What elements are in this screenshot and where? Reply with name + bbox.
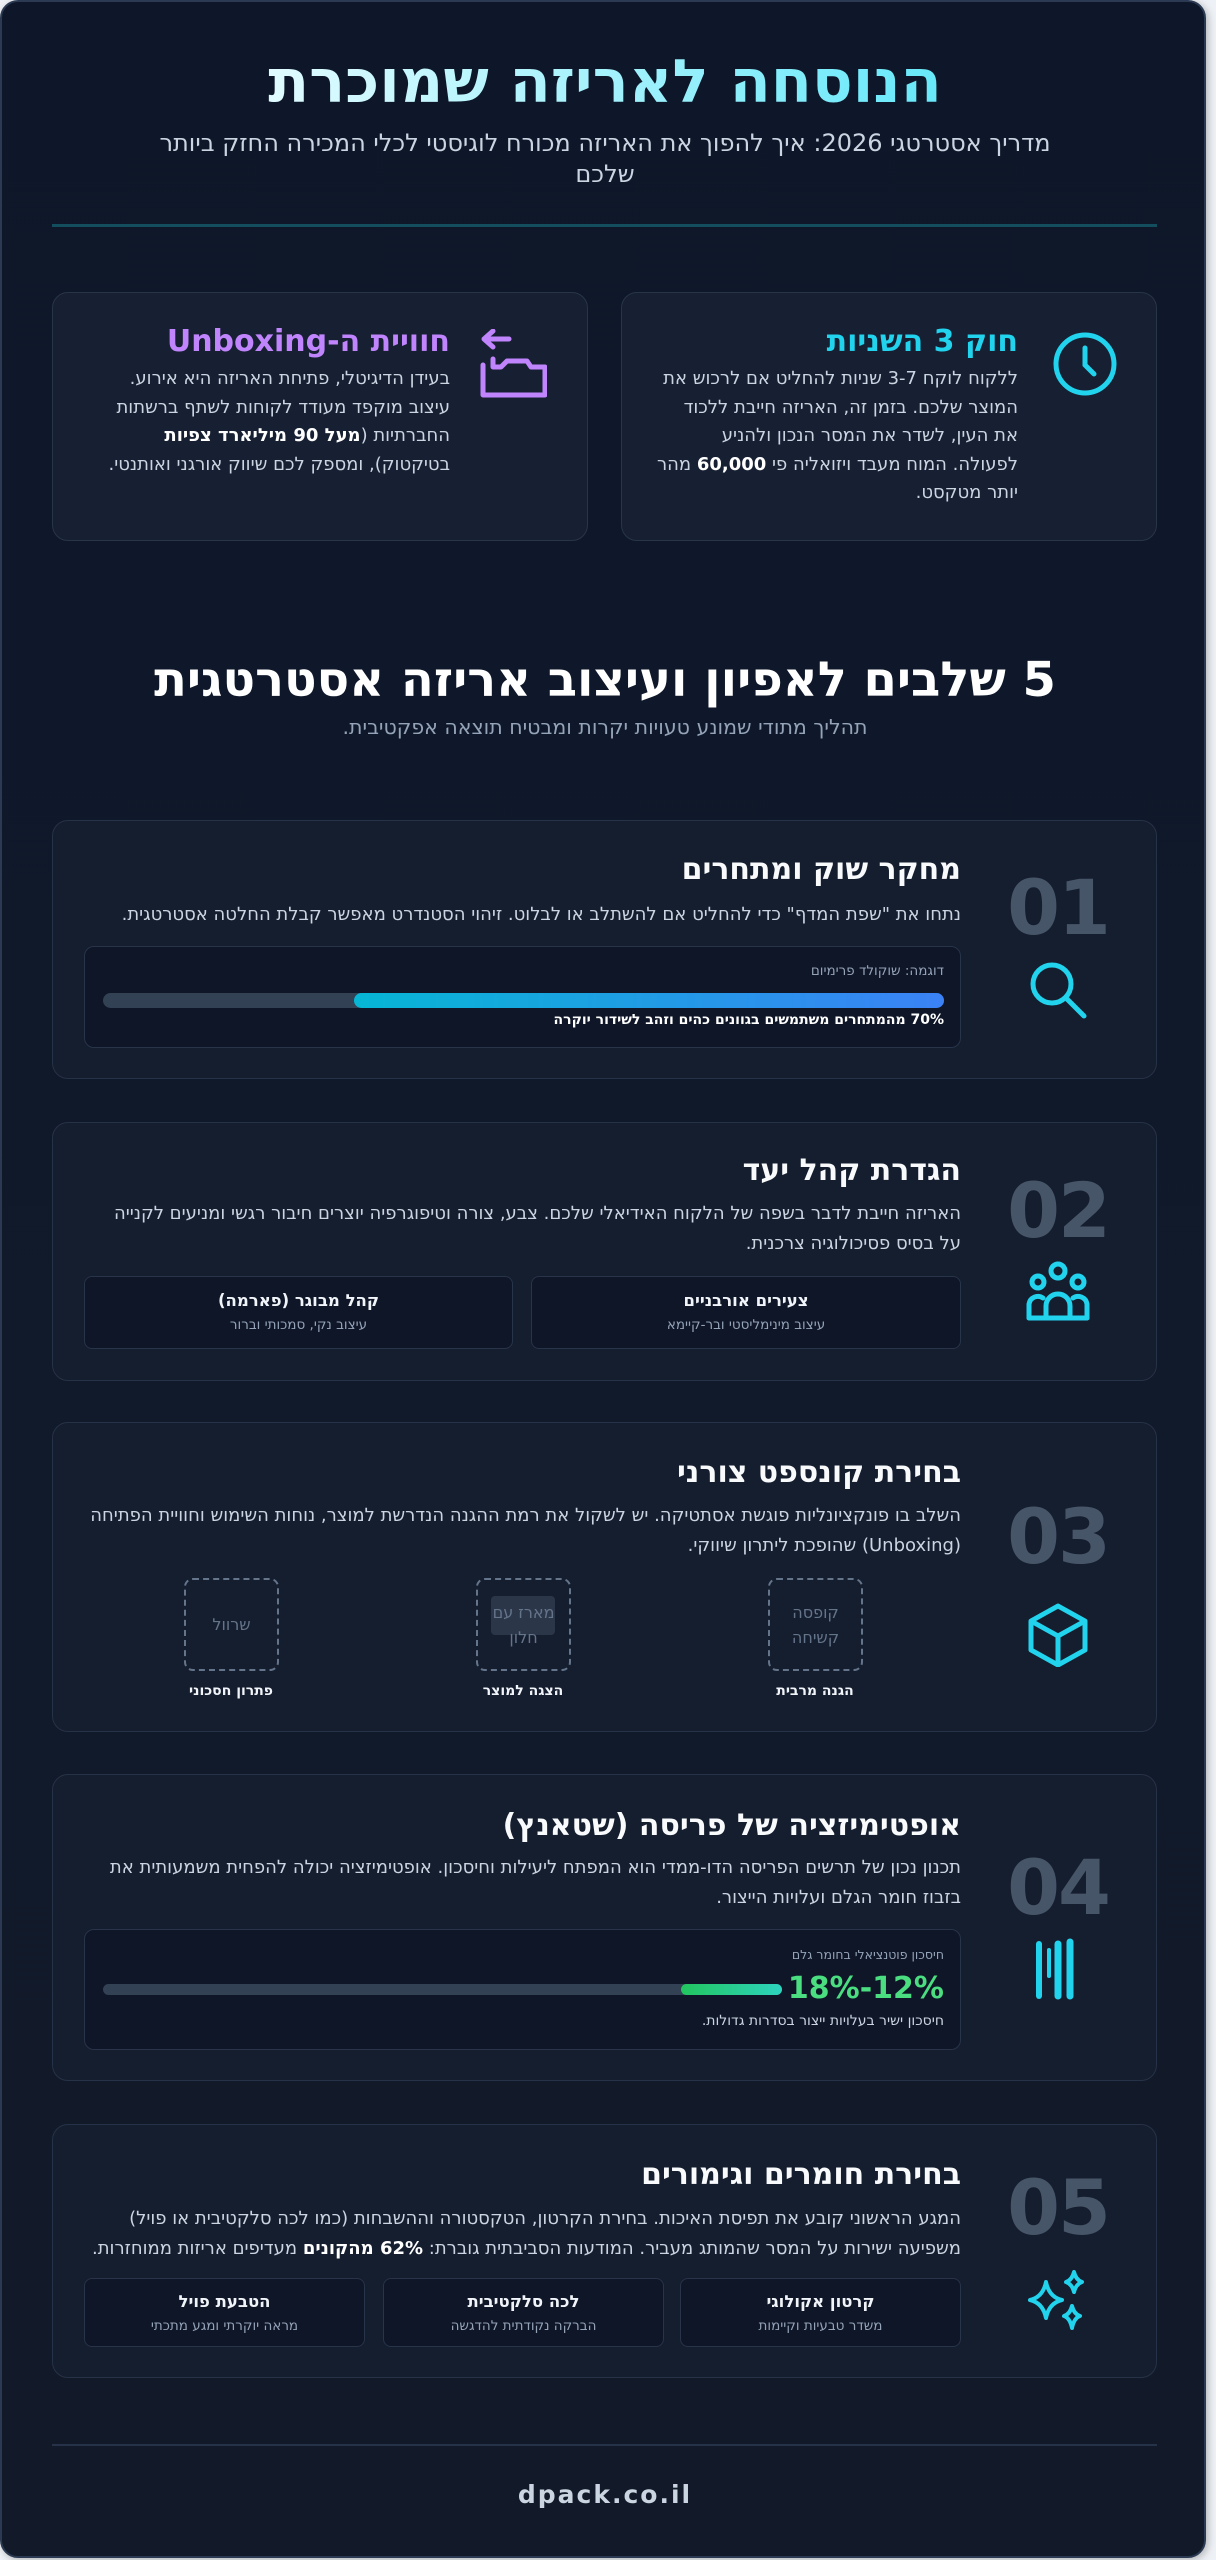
panel: step 03 [52,1422,1157,1732]
box: spot UV: לכה סלקטיבית [467,2292,580,2311]
box: foil [84,2278,365,2347]
option: rigid box: הגנה מרבית [776,1683,854,1699]
icon: people [1026,1262,1090,1320]
step text 02: על בסיס פסיכולוגיה צרכנית. [746,1232,961,1254]
option: sleeve: שרוול [212,1615,251,1634]
box: eco cardboard [680,2278,961,2347]
bar chart: material savings: 18%-12% [788,1971,944,2006]
text: unboxing: בעידן הדיגיטלי, פתיחת האריזה היא אירוע. [130,368,450,389]
step text 02: האריזה חייבת לדבר בשפה של הלקוח האידיאלי שלכם. צבע, צורה וטיפוגרפיה יוצרים חיבור רגשי ומניעים לקנייה [114,1203,961,1224]
bar chart: material savings: חיסכון פוטנציאלי בחומר גלם [792,1947,944,1962]
heading: 3 second rule: חוק 3 השניות [827,324,1018,359]
bar chart: material savings: חיסכון ישיר בעלויות ייצור בסדרות גדולות. [702,2013,944,2029]
panel: unboxing [52,292,588,541]
text: 3 second rule: את העין, לשדר את המסר הנכון ולהניע [722,425,1018,446]
step text 05: משפיעה ישירות על המסר שהמותג מעביר. המודעות הסביבתית גוברת: 62% מהקונים מעדיפים אריזות ממוחזרות. [92,2238,961,2258]
text: unboxing: עיצוב מוקפד מעודד לקוחות לשתף ברשתות [116,396,450,418]
section subtitle: תהליך מתודי שמונע טעויות יקרות ומבטיח תוצאה אפקטיבית. [342,715,867,739]
panel: step 04 [52,1774,1157,2081]
bar chart: competitors: דוגמה: שוקולד פרימיום [811,963,944,979]
box: urban youth [531,1276,961,1349]
icon: search [1030,962,1086,1018]
text: 3 second rule: ללקוח לוקח 3-7 שניות להחליט אם לרכוש את [663,368,1018,389]
number 02: 02 [1007,1166,1109,1255]
option: window box [476,1578,571,1699]
footer: website: dpack.co.il [518,2480,692,2509]
text: 3 second rule: המוצר שלכם. בזמן זה, האריזה חייבת ללכוד [684,396,1018,418]
title: הנוסחה לאריזה שמוכרת [268,47,942,117]
text: 3 second rule: לפעולה. המוח מעבד ויזואליה פי 60,000 מהר [657,454,1018,474]
option: rigid box [768,1578,863,1699]
step text 03 [90,1505,961,1556]
heading: unboxing: חוויית ה-Unboxing [167,324,450,359]
box: mature audience: קהל מבוגר (פארמה) [218,1291,379,1310]
text: unboxing [108,368,450,474]
number 04: 04 [1007,1843,1109,1932]
option: rigid box: קשיחה [792,1628,839,1646]
step title 02: הגדרת קהל יעד [743,1153,961,1188]
subtitle: מדריך אסטרטגי 2026: איך להפוך את האריזה מכורח לוגיסטי לכלי המכירה החזק ביותר [159,129,1051,157]
box: foil: מראה יוקרתי ומגע מתכתי [151,2318,298,2334]
panel: 3 second rule [621,292,1157,541]
icon: clock [1054,332,1116,396]
step text 04: תכנון נכון של תרשים הפריסה הדו-ממדי הוא המפתח ליעילות וחיסכון. אופטימיזציה יכולה להפחית משמעותית את [110,1857,961,1878]
step text 02 [114,1203,961,1254]
box: eco cardboard: משדר טבעיות וקיימות [759,2318,882,2334]
step text 01: נתחו את "שפת המדף" כדי להחליט אם להשתלב או לבלוט. זיהוי הסטנדרט מאפשר קבלת החלטה אסטרטגית. [122,904,961,925]
option: rigid box: קופסה [792,1602,839,1622]
step text 05 [92,2208,961,2258]
box: eco cardboard: קרטון אקולוגי [766,2292,875,2311]
panel: step 05 [52,2124,1157,2378]
icon: sparkles [1028,2270,1084,2330]
box: urban youth: צעירים אורבניים [684,1291,808,1310]
number 01: 01 [1007,863,1109,952]
bar chart: competitors: 70% מהמתחרים משתמשים בגוונים כהים וזהב לשידור יוקרה [554,1012,944,1028]
icon: cube [1028,1604,1088,1667]
step text 03: השלב בו פונקציונליות פוגשת אסתטיקה. יש לשקול את רמת ההגנה הנדרשת למוצר, נוחות השימוש וחוויית הפתיחה [90,1505,961,1526]
step title 04: אופטימיזציה של פריסה (שטאנץ) [503,1808,961,1843]
option: window box: הצגה למוצר [483,1683,563,1699]
option: window box: חלון [509,1628,538,1646]
option: window box: מארז עם [493,1602,554,1622]
box: mature audience: עיצוב נקי, סמכותי וברור [230,1317,367,1333]
icon: die-cut bars [1036,1938,1074,2000]
icon: unboxing [480,329,547,398]
box: foil: הטבעת פויל [179,2292,270,2311]
subtitle: שלכם [575,160,635,188]
box: mature audience [84,1276,513,1349]
step title 01: מחקר שוק ומתחרים [682,852,961,887]
text: unboxing: החברתיות (מעל 90 מיליארד צפיות [164,425,450,446]
bar chart: material savings [84,1929,961,2050]
step title 03: בחירת קונספט צורני [677,1455,961,1490]
step text 04 [110,1857,961,1908]
box: urban youth: עיצוב מינימליסטי ובר-קיימא [667,1317,825,1333]
section heading: 5 שלבים לאפיון ועיצוב אריזה אסטרטגית [154,652,1056,708]
text: 3 second rule: יותר מטקסט. [916,482,1018,503]
box: spot UV [383,2278,664,2347]
panel: step 01 [52,820,1157,1079]
subtitle [159,129,1051,188]
text: unboxing: בטיקטוק), ומספק לכם שיווק אורגני ואותנטי. [108,454,450,474]
step title 05: בחירת חומרים וגימורים [641,2157,961,2192]
bar chart: competitors [84,946,961,1048]
box: spot UV: הברקה נקודתית להדגשה [451,2318,596,2334]
step text 05: המגע הראשוני קובע את תפיסת האיכות. בחירת הקרטון, הטקסטורה וההשבחות (כמו לכה סלקטיבית או פויל) [129,2208,961,2229]
step text 03: (Unboxing) שהופכת ליתרון שיווקי. [688,1534,961,1556]
option: sleeve [184,1578,279,1699]
text: 3 second rule [657,368,1018,503]
number 05: 05 [1007,2163,1109,2252]
panel: step 02 [52,1122,1157,1381]
number 03: 03 [1007,1492,1109,1581]
step text 04: בזבוז חומר הגלם ועלויות הייצור. [716,1886,961,1908]
option: sleeve: פתרון חסכוני [189,1683,273,1699]
